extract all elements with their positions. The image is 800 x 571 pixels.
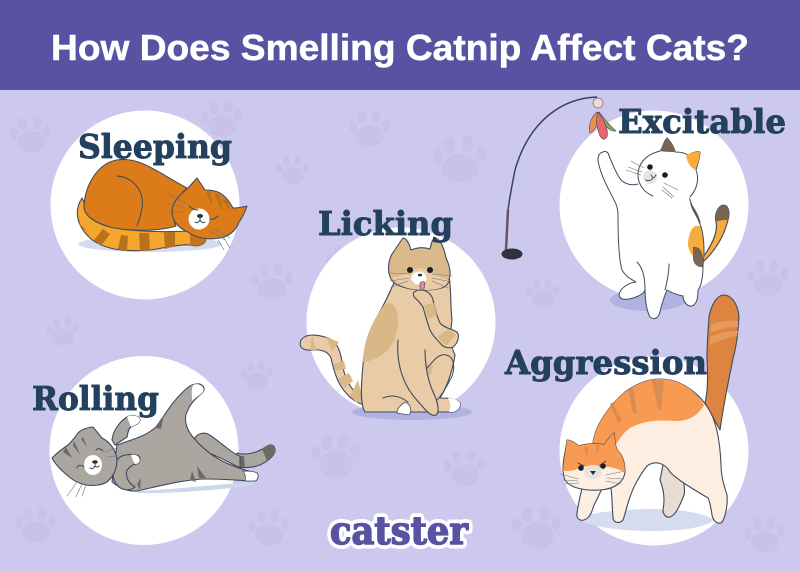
header banner bbox=[0, 0, 800, 90]
white circle: rolling bbox=[50, 356, 238, 545]
panel: licking bbox=[300, 204, 496, 420]
aggression cat illustration bbox=[561, 295, 739, 531]
licking cat illustration bbox=[300, 238, 472, 420]
panel: excitable bbox=[502, 97, 786, 319]
logo: catster: catster bbox=[330, 508, 469, 553]
background paw prints bbox=[10, 100, 788, 553]
panel: sleeping bbox=[50, 110, 247, 300]
excitable cat illustration bbox=[598, 138, 729, 319]
white circle: sleeping bbox=[50, 110, 240, 300]
white circle: excitable bbox=[560, 110, 748, 300]
sleeping cat illustration bbox=[77, 159, 247, 252]
white circle: licking bbox=[306, 228, 496, 416]
heading: Licking: Licking bbox=[318, 204, 453, 243]
heading: Aggression: Aggression bbox=[504, 343, 707, 382]
feather toy bbox=[502, 97, 616, 260]
heading: Sleeping: Sleeping bbox=[78, 127, 232, 166]
logo: catster: catster bbox=[330, 508, 469, 553]
heading: Rolling: Rolling bbox=[32, 379, 159, 418]
heading: Excitable: Excitable bbox=[618, 102, 786, 141]
white circle: aggression bbox=[560, 356, 748, 546]
panel: rolling bbox=[32, 356, 275, 545]
panel: aggression bbox=[504, 295, 748, 546]
rolling cat illustration bbox=[52, 384, 275, 497]
title: How Does Smelling Catnip Affect Cats? bbox=[51, 27, 749, 68]
